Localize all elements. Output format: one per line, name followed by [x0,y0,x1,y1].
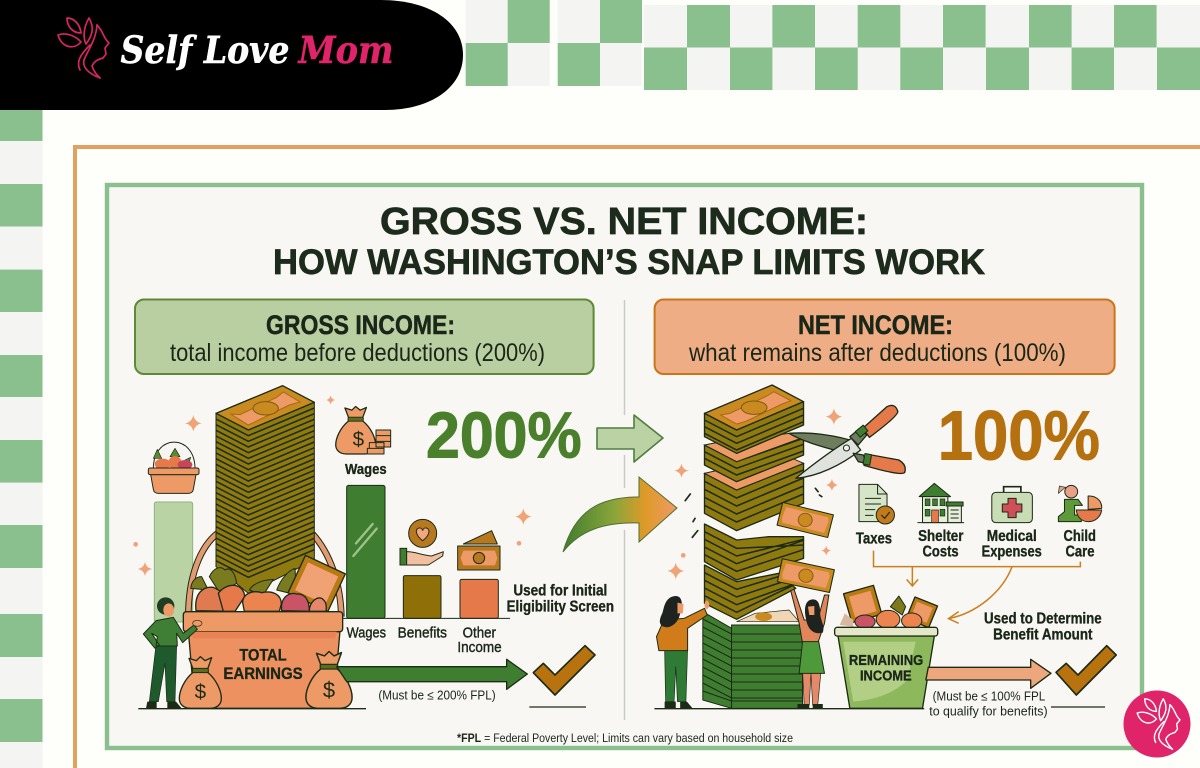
label: child care: Care [1065,544,1095,561]
panel: gross income heading [135,300,594,374]
badge: logo circle [1124,690,1190,758]
footnote: *FPL = Federal Poverty Level; Limits can vary based on household size [457,731,793,745]
callout: benefit amount: Benefit Amount [993,626,1093,643]
cash stack: cut layers [704,385,804,619]
panel: gross income heading: total income before deductions (200%) [170,339,545,367]
title [273,201,985,282]
bar label: other income: Income [457,640,502,656]
label: child care: Child [1063,528,1096,545]
figure: woman right [791,589,829,708]
basket label: EARNINGS [223,664,303,683]
panel: gross income illustration [133,386,614,709]
bottom green cash stack [703,610,803,708]
icon: house [917,483,964,523]
callout: initial eligibility: Eligibility Screen [507,599,614,616]
arrow: curved gradient [563,477,677,552]
basket handle [188,533,341,617]
callout: benefit amount [984,610,1102,643]
note: must be under 100% FPL [929,689,1048,719]
icon: wages money bag [336,406,391,454]
chart baseline [343,617,510,620]
icon: small produce basket [148,442,199,493]
icon: child with crib [1058,485,1102,522]
icon: tax document [859,484,894,524]
panel: net income heading [655,300,1115,374]
icon: shears [789,405,905,478]
big basket [183,612,343,708]
stat: 100%: 100% [938,396,1100,474]
arrow: gross result [337,659,527,689]
bin body [838,636,934,708]
panel: net income illustration [654,385,1116,719]
label: shelter costs [918,528,963,561]
title: HOW WASHINGTON’S SNAP LIMITS WORK [273,243,985,282]
header banner [0,0,463,110]
column divider [624,300,626,720]
produce in basket [191,555,345,611]
bin label: INCOME [860,668,912,685]
bar: other income [460,579,498,618]
icon: check mark [529,646,595,707]
sparkles [667,408,842,579]
icon: check mark [1051,646,1116,707]
note: must be under 100% FPL: to qualify for benefits) [929,704,1048,719]
figure: woman left [657,596,709,708]
bin label [849,652,923,685]
label: child care [1063,528,1096,561]
note: must be under 200% FPL: (Must be ≤ 200% FPL) [378,688,496,702]
label: shelter costs: Shelter [918,528,963,545]
note: must be under 100% FPL: (Must be ≤ 100% FPL [933,689,1045,704]
icon: cash [458,531,500,570]
sparkles [133,395,532,576]
bar label: benefits: Benefits [398,625,447,641]
ground line [138,707,366,711]
label: taxes: Taxes [856,530,892,547]
title: GROSS VS. NET INCOME: [380,201,868,243]
bar: wages [347,485,385,618]
orange outer frame [75,147,1200,768]
arrow: net result [926,659,1051,688]
brand name accent: Mom [297,28,394,72]
flying banknotes [777,502,834,593]
infographic panel [107,185,1142,748]
icon: wages money bag: $ [353,428,365,451]
label: medical expenses [982,528,1042,561]
callout: benefit amount: Used to Determine [984,610,1102,627]
arrow: gross to net [597,415,663,462]
icon: money bag left [179,657,221,708]
brand name: Self Love [120,28,290,72]
panel: gross income heading: GROSS INCOME: [266,310,455,340]
icon: logo face and leaves [58,18,109,78]
label: shelter costs: Costs [923,544,959,561]
bar label: wages heading: Wages [345,462,387,478]
bin rim [835,627,938,636]
debris dashes [685,488,822,537]
bar label: other income [457,625,502,656]
icon: medical kit [992,487,1032,523]
icon: heart in hand [400,519,443,565]
bar label: wages: Wages [347,625,386,641]
figure: man pointing [143,597,202,708]
basket label: TOTAL [239,646,287,665]
stat: 200%: 200% [426,398,582,471]
callout: initial eligibility [507,583,614,616]
bin contents [840,585,938,628]
panel: net income heading: NET INCOME: [798,310,953,340]
label: medical expenses: Expenses [982,544,1042,561]
checker strip: left [0,110,42,768]
bin label: REMAINING [849,652,923,669]
panel: net income heading: what remains after deductions (100%) [688,339,1066,367]
icon: money bag right: $ [323,678,335,703]
light green bar [154,502,193,622]
ground line [654,707,924,711]
bar label: other income: Other [463,625,496,641]
callout: initial eligibility: Used for Initial [513,583,607,600]
icon: money bag left: $ [195,680,207,703]
bar: benefits [403,576,441,618]
label: medical expenses: Medical [987,528,1037,545]
checker strip: top [466,0,1200,90]
cash stack [216,386,314,593]
remaining income bin [835,585,938,708]
icon: money bag right [306,651,352,708]
basket label [223,646,303,683]
connectors: deductions to remaining income [874,551,1080,623]
